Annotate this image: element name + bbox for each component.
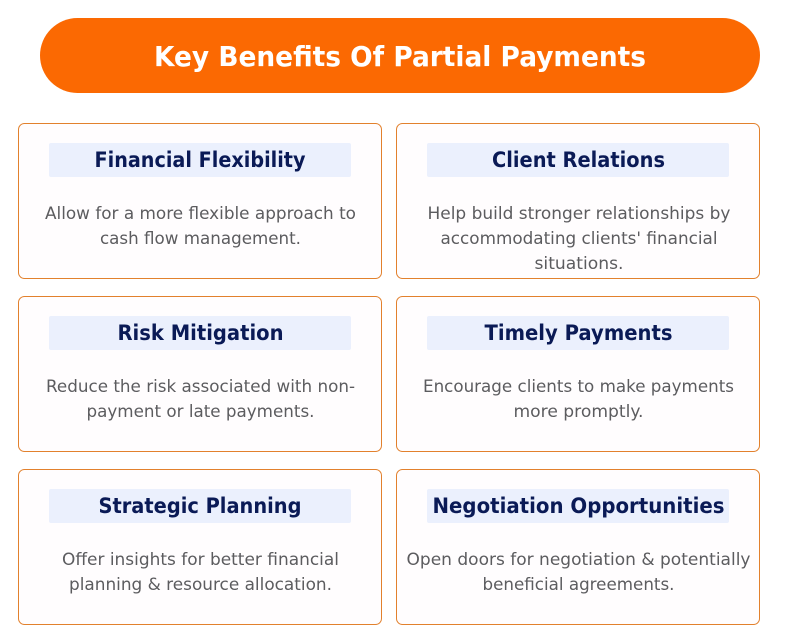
panel: Timely Payments (396, 296, 760, 452)
title: Key Benefits Of Partial Payments (154, 40, 646, 73)
text: Strategic Planning description: Offer insights for better financial (62, 550, 339, 570)
panel: Risk Mitigation (18, 296, 382, 452)
panel: Client Relations (396, 124, 760, 278)
panel: Negotiation Opportunities (396, 470, 760, 624)
title (40, 18, 760, 93)
text: Client Relations description: accommodating clients' financial (440, 229, 718, 249)
heading: Strategic Planning: Strategic Planning (98, 494, 302, 518)
text: Client Relations description: situations. (534, 254, 624, 274)
heading: Timely Payments: Timely Payments (484, 321, 672, 345)
text: Strategic Planning description: planning & resource allocation. (69, 575, 332, 595)
text: Strategic Planning description (62, 550, 339, 595)
heading: Negotiation Opportunities: Negotiation Opportunities (432, 494, 724, 518)
heading: Financial Flexibility: Financial Flexibility (94, 148, 306, 172)
text: Negotiation Opportunities description (406, 550, 750, 595)
text: Timely Payments description (423, 377, 734, 422)
heading: Risk Mitigation: Risk Mitigation (118, 321, 284, 345)
text: Negotiation Opportunities description: beneficial agreements. (482, 575, 674, 595)
text: Financial Flexibility description (45, 204, 356, 249)
panel: Financial Flexibility (18, 124, 382, 278)
text: Financial Flexibility description: Allow for a more flexible approach to (45, 204, 356, 224)
text: Timely Payments description: Encourage clients to make payments (423, 377, 734, 397)
text: Client Relations description (428, 204, 730, 274)
text: Risk Mitigation description: Reduce the risk associated with non- (46, 377, 355, 397)
text: Financial Flexibility description: cash flow management. (100, 229, 301, 249)
text: Timely Payments description: more promptly. (514, 402, 644, 422)
heading: Client Relations: Client Relations (492, 148, 665, 172)
text: Risk Mitigation description: payment or late payments. (86, 402, 314, 422)
text: Negotiation Opportunities description: Open doors for negotiation & potentially (406, 550, 750, 570)
text: Client Relations description: Help build stronger relationships by (428, 204, 730, 224)
panel: Strategic Planning (18, 470, 382, 624)
text: Risk Mitigation description (46, 377, 355, 422)
